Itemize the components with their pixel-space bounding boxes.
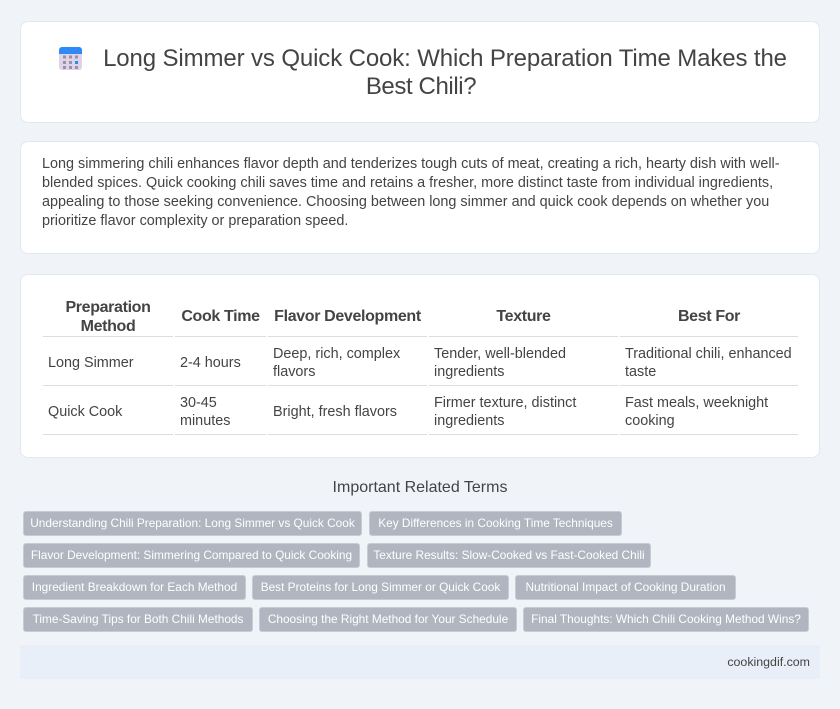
tag: Ingredient Breakdown for Each Method bbox=[32, 580, 237, 594]
table header: Preparation bbox=[65, 299, 151, 316]
table row: Quick Cook: Quick Cook bbox=[48, 404, 122, 420]
tag: Choosing the Right Method for Your Schedule bbox=[268, 612, 508, 626]
header card: Best Chili? bbox=[366, 73, 476, 100]
tag bbox=[367, 543, 651, 568]
footer source: cookingdif.com bbox=[727, 655, 810, 669]
table row: Long Simmer: ingredients bbox=[434, 364, 504, 380]
tag: Time-Saving Tips for Both Chili Methods bbox=[33, 612, 243, 626]
tag: Key Differences in Cooking Time Techniques bbox=[378, 516, 613, 530]
description text: prioritize flavor complexity or preparation speed. bbox=[42, 213, 348, 229]
description card bbox=[20, 141, 820, 254]
table header: Texture bbox=[496, 308, 551, 325]
table row: Quick Cook: Fast meals, weeknight bbox=[625, 395, 768, 411]
table row: Long Simmer: 2-4 hours bbox=[180, 355, 241, 371]
tag bbox=[23, 543, 360, 568]
title bbox=[103, 45, 787, 100]
tag bbox=[369, 511, 622, 536]
table header: Best For bbox=[678, 308, 740, 325]
table row: Long Simmer: taste bbox=[625, 364, 656, 380]
description text: Long simmering chili enhances flavor depth and tenderizes tough cuts of meat, creating a rich, hearty dish with well- bbox=[42, 156, 780, 172]
table header: Flavor Development bbox=[274, 308, 421, 325]
table header bbox=[65, 299, 740, 335]
tag: Final Thoughts: Which Chili Cooking Method Wins? bbox=[531, 612, 801, 626]
header card: Long Simmer vs Quick Cook: Which Preparation Time Makes the bbox=[103, 45, 787, 72]
table row: Quick Cook: minutes bbox=[180, 413, 230, 429]
table row: Long Simmer: Traditional chili, enhanced bbox=[625, 346, 792, 362]
tag bbox=[23, 607, 253, 632]
table row: Long Simmer: Long Simmer bbox=[48, 355, 134, 371]
tag bbox=[515, 575, 736, 600]
table row: Quick Cook: cooking bbox=[625, 413, 675, 429]
description text bbox=[42, 156, 780, 229]
description text: blended spices. Quick cooking chili saves time and retains a fresher, more distinct taste from individual ingredients, bbox=[42, 175, 773, 191]
table row: Quick Cook: ingredients bbox=[434, 413, 504, 429]
table row: Quick Cook: Bright, fresh flavors bbox=[273, 404, 397, 420]
tag: Texture Results: Slow-Cooked vs Fast-Cooked Chili bbox=[373, 548, 645, 562]
table row: Quick Cook bbox=[43, 385, 798, 435]
table row: Long Simmer: Tender, well-blended bbox=[434, 346, 566, 362]
table row: Long Simmer: flavors bbox=[273, 364, 315, 380]
tag: Understanding Chili Preparation: Long Simmer vs Quick Cook bbox=[30, 516, 355, 530]
description text: appealing to those seeking convenience. Choosing between long simmer and quick cook depends on whether you bbox=[42, 194, 769, 210]
comparison table card bbox=[20, 274, 820, 458]
footer bar bbox=[20, 645, 820, 679]
tag bbox=[523, 607, 809, 632]
tag bbox=[259, 607, 517, 632]
table header: Method bbox=[81, 318, 135, 335]
table header: Cook Time bbox=[181, 308, 260, 325]
related terms heading: Important Related Terms bbox=[333, 479, 507, 496]
tag bbox=[252, 575, 509, 600]
related terms tags bbox=[23, 511, 809, 632]
table row: Quick Cook: Firmer texture, distinct bbox=[434, 395, 576, 411]
tag bbox=[23, 511, 362, 536]
tag: Nutritional Impact of Cooking Duration bbox=[525, 580, 726, 594]
table row: Quick Cook: 30-45 bbox=[180, 395, 217, 411]
icon: calendar bbox=[59, 47, 82, 70]
table row: Long Simmer bbox=[43, 336, 798, 380]
table row: Long Simmer: Deep, rich, complex bbox=[273, 346, 400, 362]
tag: Flavor Development: Simmering Compared to Quick Cooking bbox=[31, 548, 352, 562]
tag: Best Proteins for Long Simmer or Quick Cook bbox=[261, 580, 500, 594]
header card bbox=[20, 21, 820, 123]
tag bbox=[23, 575, 246, 600]
